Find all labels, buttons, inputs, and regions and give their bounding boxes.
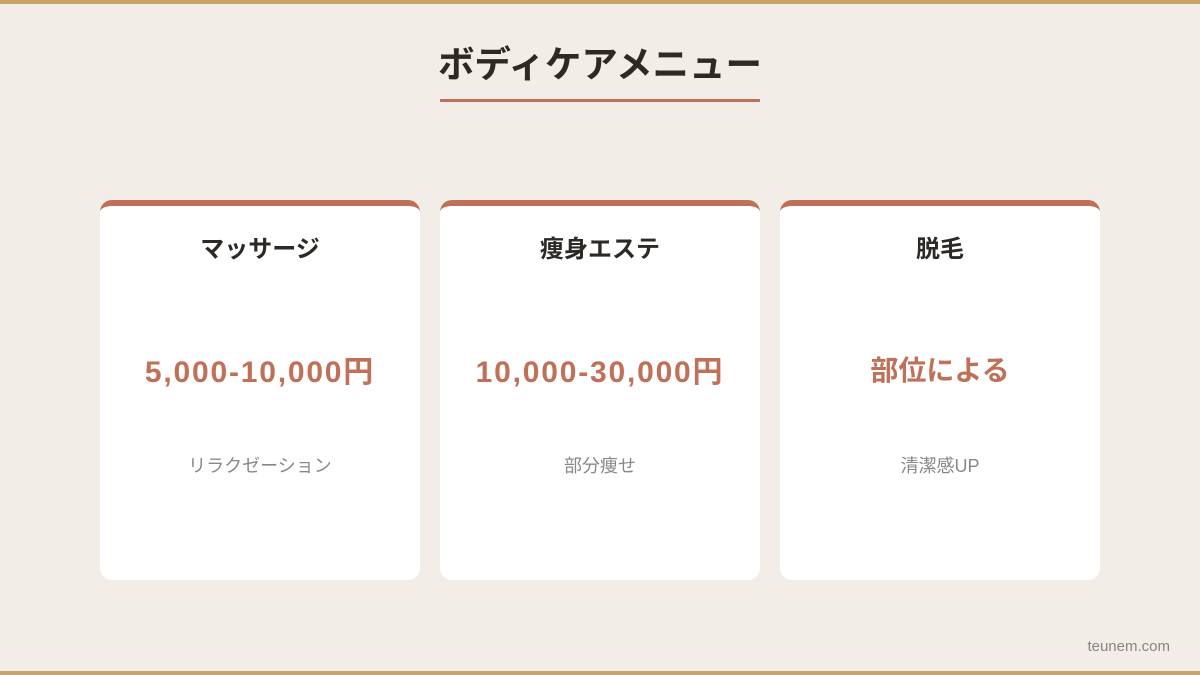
price: 部位による [870,355,1010,386]
heading: 痩身エステ [540,236,660,263]
description: 清潔感UP [900,456,980,476]
panel: massage [100,200,420,580]
description: リラクゼーション [188,456,332,476]
footer: teunem.com [1087,638,1170,655]
price: 10,000-30,000円 [476,356,724,389]
panel: slimming [440,200,760,580]
price: 5,000-10,000円 [145,356,375,389]
panel: hair removal [780,200,1100,580]
description: 部分痩せ [564,456,636,476]
title: ボディケアメニュー [438,44,762,85]
heading: 脱毛 [916,236,964,263]
heading: マッサージ [200,236,320,263]
